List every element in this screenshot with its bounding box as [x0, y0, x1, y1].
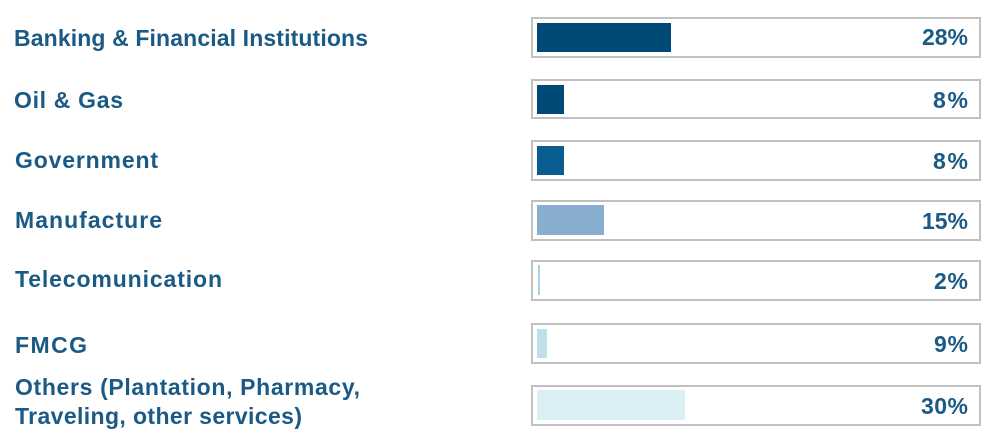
bar track — [532, 324, 980, 363]
bar track — [532, 261, 980, 300]
row: Telecomunication — [15, 261, 980, 300]
bar: 8% — [537, 85, 564, 114]
label: Oil & Gas: Oil & Gas — [14, 87, 123, 113]
value: 28%: 28% — [922, 24, 968, 50]
value: 30%: 30% — [921, 393, 968, 419]
row: Banking & Financial Institutions — [14, 18, 980, 57]
bar track — [532, 201, 980, 240]
label: FMCG: FMCG — [15, 332, 87, 358]
bar: 8% — [537, 146, 564, 175]
bar track — [532, 386, 980, 425]
row: Government — [15, 141, 980, 180]
bar track — [532, 80, 980, 118]
row: Oil & Gas — [14, 80, 980, 118]
bar track — [532, 18, 980, 57]
bar: 30% — [537, 390, 685, 420]
bar: 2% — [538, 265, 540, 295]
bar track — [532, 141, 980, 180]
value: 8%: 8% — [933, 148, 968, 174]
label: Others (Plantation, Pharmacy, Traveling, other services) — [15, 374, 360, 429]
value: 2%: 2% — [934, 268, 968, 294]
bar: 28% — [537, 23, 671, 52]
row: FMCG — [15, 324, 980, 363]
label: Government: Government — [15, 147, 158, 173]
bar: 9% — [537, 329, 547, 358]
row: Others — [15, 374, 980, 429]
value: 8%: 8% — [933, 87, 968, 113]
label: Others (Plantation, Pharmacy, Traveling, other services): Traveling, other services) — [15, 403, 302, 429]
row: Manufacture — [15, 201, 980, 240]
value: 9%: 9% — [934, 331, 968, 357]
label: Manufacture: Manufacture — [15, 207, 162, 233]
label: Banking & Financial Institutions: Banking & Financial Institutions — [14, 25, 368, 51]
bar: 15% — [537, 205, 604, 235]
label: Others (Plantation, Pharmacy, Traveling, other services): Others (Plantation, Pharmacy, — [15, 374, 360, 400]
value: 15%: 15% — [922, 208, 968, 234]
label: Telecomunication: Telecomunication — [15, 266, 222, 292]
